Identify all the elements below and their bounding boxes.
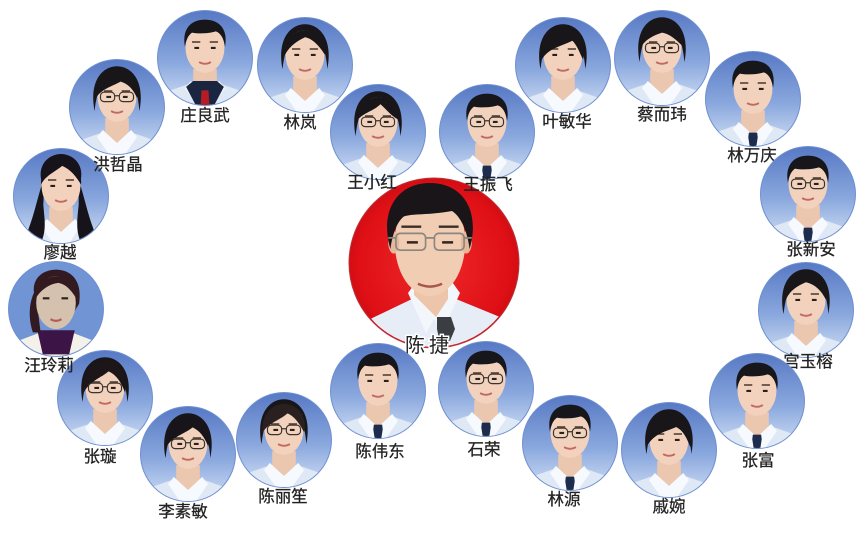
member: 陈伟东	[330, 343, 426, 459]
portrait: 陈捷	[349, 178, 519, 348]
portrait: 石荣	[438, 341, 534, 437]
member: 林源	[522, 395, 618, 507]
name: 戚婉: 戚婉	[652, 497, 686, 516]
member: 庄良武	[157, 10, 253, 123]
name: 洪哲晶: 洪哲晶	[93, 155, 143, 174]
portrait: 陈伟东	[330, 343, 426, 439]
name: 廖越: 廖越	[44, 243, 76, 262]
portrait: 陈丽笙	[236, 392, 332, 488]
portrait: 蔡而玮	[614, 10, 710, 106]
name: 蔡而玮: 蔡而玮	[637, 105, 687, 124]
portrait: 张新安	[760, 146, 856, 242]
member: 李素敏	[140, 406, 236, 519]
name: 张璇: 张璇	[84, 447, 116, 466]
portrait: 张璇	[57, 350, 153, 446]
portrait: 汪玲莉	[5, 262, 107, 359]
member: 廖越	[13, 148, 109, 260]
name: 林源: 林源	[548, 490, 580, 509]
name: 张富: 张富	[742, 451, 774, 470]
member: 戚婉	[621, 402, 717, 514]
name: 宫玉榕: 宫玉榕	[783, 352, 833, 371]
name: 叶敏华: 叶敏华	[542, 112, 592, 131]
member: 张富	[709, 353, 805, 468]
portrait: 王振飞	[439, 84, 535, 180]
portrait: 叶敏华	[515, 17, 611, 113]
name: 庄良武: 庄良武	[180, 106, 230, 125]
portrait: 宫玉榕	[758, 262, 854, 358]
member: 林万庆	[705, 51, 801, 163]
member: 王振飞	[439, 84, 535, 192]
member: 宫玉榕	[758, 262, 854, 369]
member: 蔡而玮	[614, 10, 710, 122]
name: 林万庆: 林万庆	[727, 146, 777, 165]
portrait: 张富	[709, 353, 805, 449]
member: 洪哲晶	[63, 60, 171, 174]
member: 林岚	[257, 17, 353, 130]
name: 王小红: 王小红	[347, 173, 397, 192]
member: 石荣	[438, 341, 534, 457]
member: 陈丽笙	[236, 392, 332, 504]
member: 汪玲莉	[5, 262, 107, 375]
portrait: 林万庆	[705, 51, 801, 147]
name: 王振飞: 王振飞	[463, 175, 513, 194]
member: 王小红	[330, 84, 426, 190]
portrait: 王小红	[330, 84, 426, 180]
name: 石荣: 石荣	[468, 440, 500, 459]
name: 李素敏: 李素敏	[158, 502, 208, 521]
portrait: 廖越	[13, 148, 109, 244]
name: 张新安: 张新安	[786, 240, 836, 259]
central member: 陈捷	[349, 178, 519, 357]
name: 林岚: 林岚	[284, 113, 316, 132]
name: 陈丽笙: 陈丽笙	[258, 487, 308, 506]
member: 张新安	[760, 146, 856, 257]
member: 张璇	[57, 350, 153, 464]
name: 陈捷: 陈捷	[405, 334, 453, 357]
portrait: 洪哲晶	[63, 60, 171, 161]
portrait: 林源	[522, 395, 618, 491]
name: 陈伟东: 陈伟东	[355, 442, 405, 461]
portrait: 林岚	[257, 17, 353, 113]
member: 叶敏华	[515, 17, 611, 129]
portrait: 庄良武	[157, 10, 253, 106]
portrait: 戚婉	[621, 402, 717, 498]
portrait: 李素敏	[140, 406, 236, 502]
name: 汪玲莉: 汪玲莉	[24, 356, 74, 375]
